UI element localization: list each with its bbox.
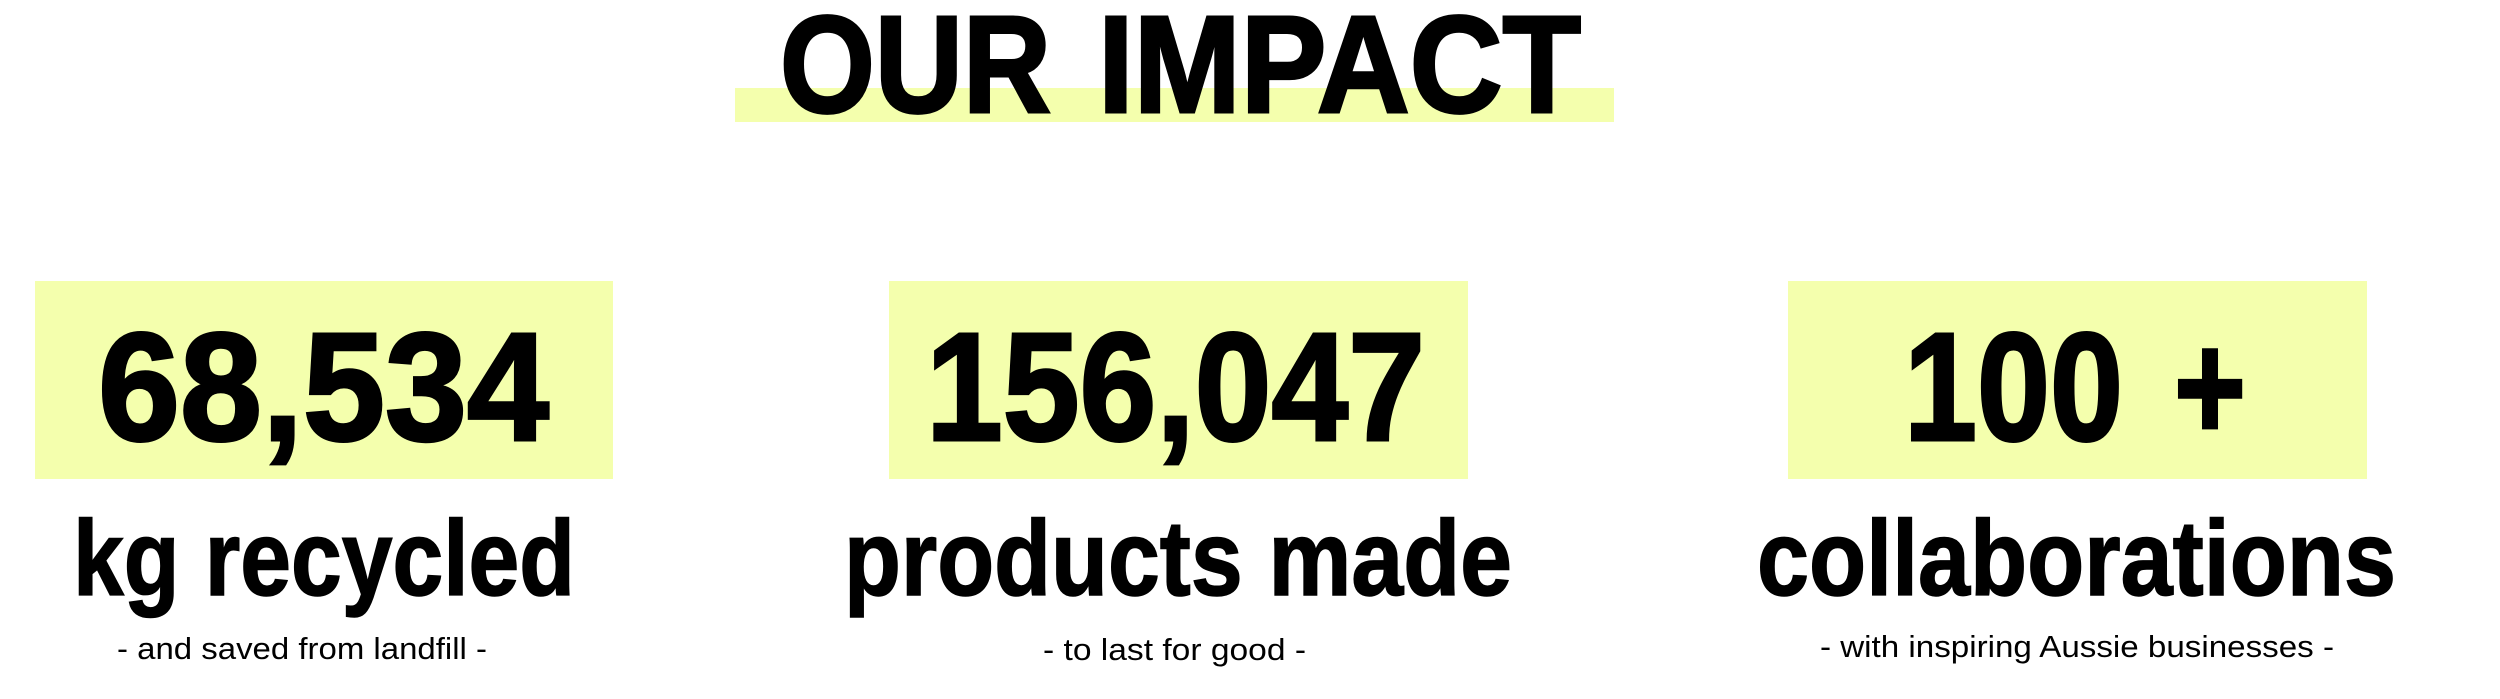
panel: kg recycled <box>35 281 613 666</box>
label: kg recycled <box>73 498 575 618</box>
number: + <box>2174 301 2246 473</box>
label: products made <box>844 498 1512 618</box>
title with highlight <box>735 0 1614 142</box>
number: 100 <box>1904 301 2123 473</box>
number: 68,534 <box>98 301 549 473</box>
number box <box>35 281 613 479</box>
number box <box>889 281 1468 479</box>
title highlight bar <box>735 88 1614 122</box>
caption: - and saved from landfill - <box>117 631 487 666</box>
number: 156,047 <box>926 301 1425 473</box>
caption: - to last for good - <box>1043 632 1306 667</box>
label: collaborations <box>1757 498 2396 618</box>
panel: products made <box>844 281 1512 667</box>
caption: - with inspiring Aussie businesses - <box>1820 629 2334 664</box>
panel: collaborations <box>1757 281 2396 664</box>
number box <box>1788 281 2367 479</box>
